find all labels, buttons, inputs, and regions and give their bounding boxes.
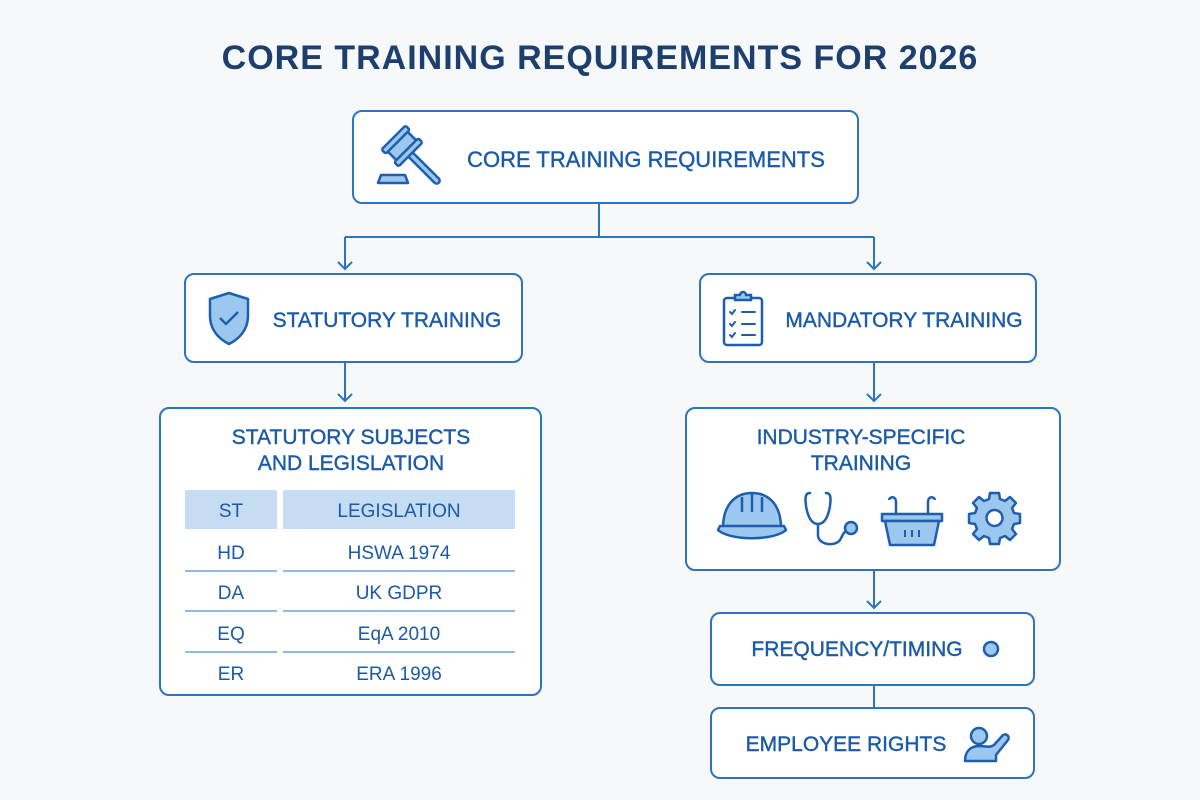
panel: industry-specific training: TRAINING xyxy=(811,452,911,475)
panel: core training requirements: CORE TRAINING REQUIREMENTS xyxy=(467,147,825,172)
table header: LEGISLATION xyxy=(337,501,461,522)
icon: dot xyxy=(984,642,998,656)
panel: employee rights xyxy=(711,708,1034,778)
panel: industry-specific training: INDUSTRY-SPECIFIC xyxy=(757,426,965,449)
icon: stethoscope xyxy=(805,493,857,544)
panel: industry-specific training xyxy=(686,408,1060,570)
icon: gavel xyxy=(378,125,451,195)
icon: shield xyxy=(210,293,248,344)
icon: clipboard xyxy=(724,292,762,345)
panel: core training requirements xyxy=(353,111,858,203)
title: CORE TRAINING REQUIREMENTS FOR 2026 xyxy=(222,39,978,77)
panel: mandatory training xyxy=(700,274,1036,362)
icon: gear xyxy=(969,493,1020,544)
table rows: UK GDPR xyxy=(356,583,442,604)
connector: frequency to rights xyxy=(873,685,875,708)
panel: employee rights: EMPLOYEE RIGHTS xyxy=(746,733,946,756)
table rows xyxy=(185,543,515,685)
table header: ST xyxy=(219,501,244,522)
icon: hard hat xyxy=(718,493,786,538)
arrow: statutory to subjects xyxy=(338,362,352,401)
arrow: industry to frequency xyxy=(867,570,881,608)
table rows: HSWA 1974 xyxy=(348,543,451,564)
panel: statutory subjects table: AND LEGISLATION xyxy=(258,452,444,475)
panel: statutory training xyxy=(185,274,522,362)
table rows: DA xyxy=(218,583,245,604)
icon: basket xyxy=(882,497,942,545)
table rows: EqA 2010 xyxy=(358,624,440,645)
panel: statutory subjects table: STATUTORY SUBJECTS xyxy=(232,426,470,449)
panel: mandatory training: MANDATORY TRAINING xyxy=(785,309,1023,332)
panel: statutory subjects table xyxy=(160,408,541,695)
table rows: ER xyxy=(218,664,244,685)
panel: statutory training: STATUTORY TRAINING xyxy=(273,309,501,332)
table rows: EQ xyxy=(217,624,245,645)
table rows: ERA 1996 xyxy=(356,664,442,685)
panel: frequency/timing: FREQUENCY/TIMING xyxy=(751,638,963,661)
table rows: HD xyxy=(217,543,245,564)
table header xyxy=(185,490,515,529)
icon: person raising hand xyxy=(965,728,1009,761)
arrow: mandatory to industry xyxy=(867,362,881,401)
panel: frequency/timing xyxy=(711,613,1034,685)
connectors from top box xyxy=(338,203,881,269)
